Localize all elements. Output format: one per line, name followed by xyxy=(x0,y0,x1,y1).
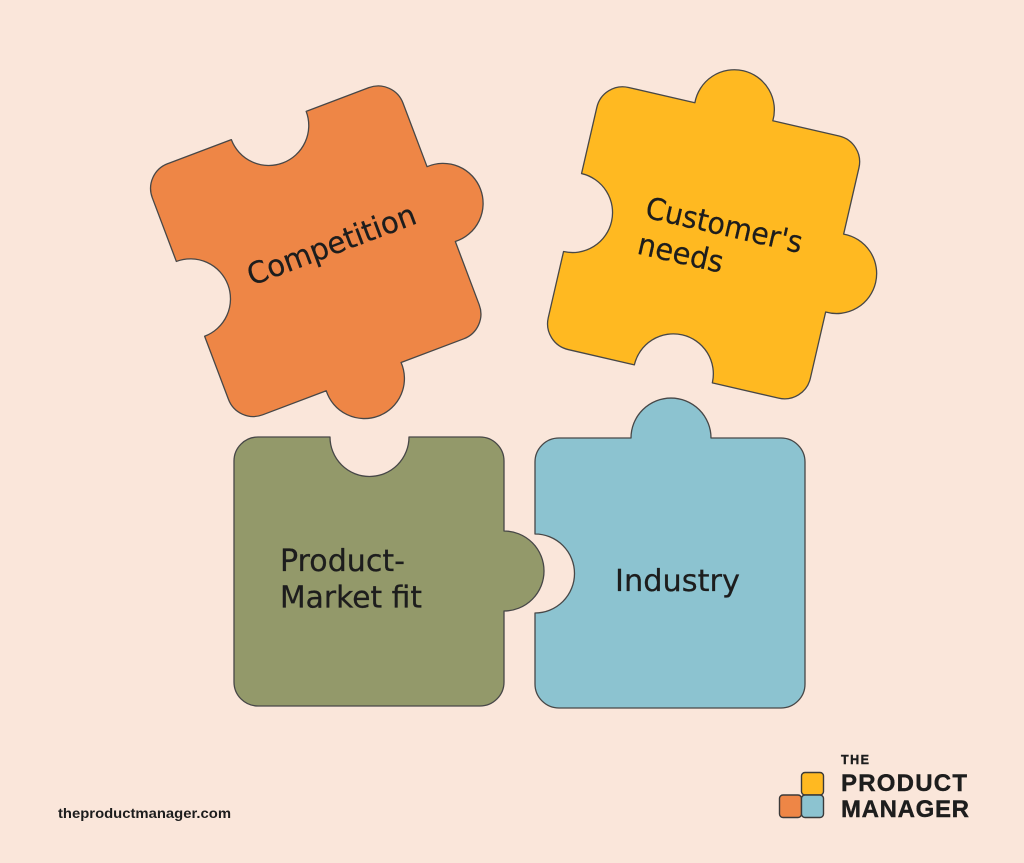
green puzzle shape xyxy=(234,437,544,706)
logo wordmark xyxy=(841,753,969,823)
label: Competition: Competition xyxy=(242,198,421,293)
logo icon: three squares xyxy=(780,772,824,818)
logo: The Product Manager xyxy=(780,753,969,823)
orange puzzle shape xyxy=(143,63,543,464)
panel: product-market fit puzzle piece xyxy=(234,437,544,706)
website url: theproductmanager.com xyxy=(58,806,231,821)
panel: competition puzzle piece xyxy=(143,63,543,464)
panel: customer's needs puzzle piece xyxy=(542,41,915,414)
label: Customer's needs: Customer's xyxy=(642,191,806,261)
label: Product-Market fit: Product- xyxy=(280,544,405,579)
panel: product-market fit puzzle piece: Market fit xyxy=(280,580,422,616)
logo wordmark: MANAGER xyxy=(841,796,969,823)
panel: customer's needs puzzle piece: needs xyxy=(634,227,727,281)
label: Industry: Industry xyxy=(615,564,740,599)
logo wordmark: PRODUCT xyxy=(841,770,967,797)
panel: industry puzzle piece xyxy=(535,398,805,708)
blue puzzle shape xyxy=(535,398,805,708)
logo wordmark: THE xyxy=(841,753,869,767)
yellow puzzle shape xyxy=(542,41,915,414)
